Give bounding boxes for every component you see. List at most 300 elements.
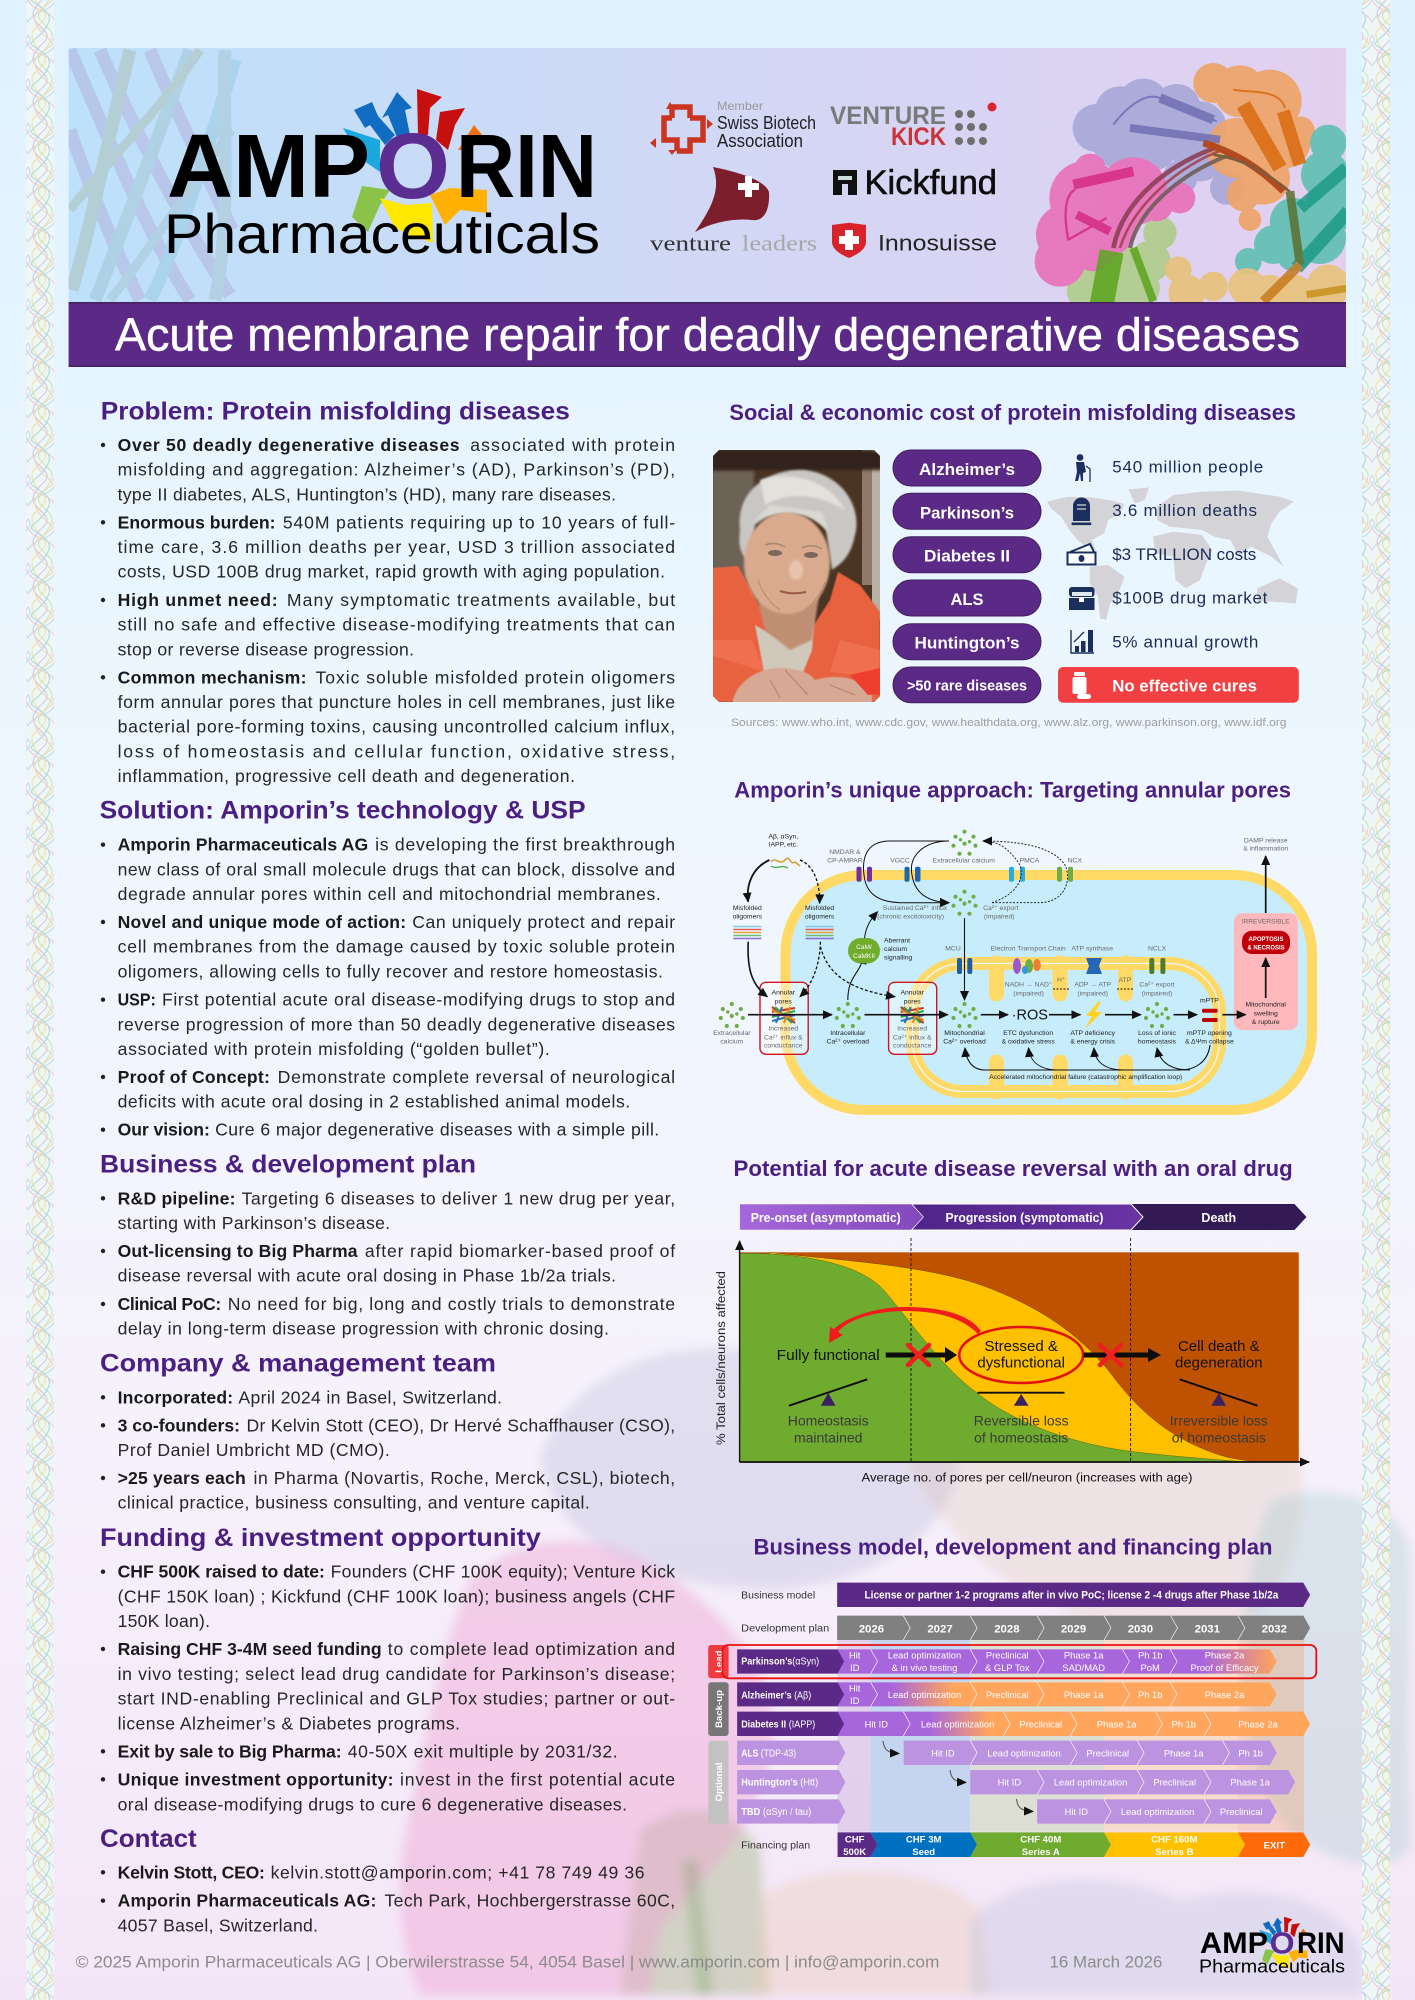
programme stages: Parkinson's: Lead optimization: [888, 1649, 961, 1660]
programme stages: Diabetes II: Lead optimization: [921, 1718, 994, 1729]
axis label: y: % Total cells/neurons affected: [714, 1271, 728, 1445]
side tags: Back-up: [714, 1690, 725, 1728]
programme stages: Huntington's: Hit ID: [998, 1777, 1021, 1788]
stage chevrons: Pre-onset (asymptomatic): [751, 1211, 901, 1225]
text block: business plan bullets: Targeting 6 diseases to deliver 1 new drug per year,: [242, 1188, 675, 1208]
programme stages: Huntington's: Preclinical: [1153, 1777, 1196, 1788]
programme stages: Parkinson's: Hit: [849, 1649, 861, 1660]
annular pore boxes: conductance: [893, 1043, 932, 1050]
text block: funding bullets: 40-50X exit multiple by 2031/32.: [348, 1741, 618, 1761]
text block: business plan bullets: delay in long-term disease progression with chronic dosing.: [118, 1319, 609, 1339]
diagram labels: Loss of ionic: [1138, 1030, 1176, 1037]
diagram labels: oligomers: [733, 914, 763, 921]
financing rounds: 500K: [843, 1847, 866, 1858]
logo: Amporin Pharmaceuticals: AMP: [167, 117, 370, 217]
diagram labels: (impaired): [1013, 990, 1044, 997]
text block: funding bullets: Founders (CHF 100K equity); Venture Kick: [331, 1562, 675, 1582]
text block: problem bullets: bacterial pore-forming toxins, causing uncontrolled calcium influx,: [118, 717, 675, 737]
disease row labels: [741, 1657, 819, 1818]
panel: development and financing plan: [708, 1534, 1316, 1858]
programme stages: ALS: [931, 1747, 1263, 1758]
programme stages: Alzheimer's: Phase 1a: [1064, 1689, 1104, 1700]
calcium dot clusters: [719, 830, 1170, 1028]
text block: contact bullets: kelvin.stott@amporin.com; +41 78 749 49 36: [271, 1862, 645, 1882]
condition pills: Diabetes II: [924, 548, 1010, 566]
diagram labels: (impaired): [984, 914, 1014, 921]
programme stages: Parkinson's: & in vivo testing: [892, 1662, 957, 1673]
text block: problem bullets: Toxic soluble misfolded protein oligomers: [316, 667, 675, 687]
disease row labels: Alzheimer’s (Aβ): [741, 1690, 811, 1701]
balance captions: of homeostasis: [1172, 1429, 1266, 1445]
side tags: [708, 1645, 729, 1824]
panel: social and economic cost: [712, 400, 1299, 729]
text block: problem bullets: type II diabetes, ALS, Huntington’s (HD), many rare diseases.: [118, 484, 616, 504]
text block: company bullets: clinical practice, business consulting, and venture capital.: [118, 1493, 590, 1513]
label: cell death: degeneration: [1175, 1355, 1263, 1372]
icon: walking person: [1075, 454, 1090, 482]
text block: solution bullets: cell membranes from the damage caused by toxic soluble protein: [118, 937, 675, 957]
text block: funding bullets: Raising CHF 3-4M seed funding: [118, 1639, 382, 1659]
text block: solution bullets: new class of oral small molecule drugs that can block, dissolve and: [118, 859, 675, 879]
footer logo: [1199, 1917, 1345, 1976]
heading: solution: Solution: Amporin’s technology & USP: [100, 796, 586, 824]
text block: problem bullets: 540M patients requiring up to 10 years of full-: [283, 512, 675, 532]
logo: Swiss Biotech Association: [650, 99, 816, 155]
heading: company and team: Company & management team: [100, 1350, 496, 1378]
logo: venture leaders: venture: [650, 231, 731, 256]
label: cell death: Cell death &: [1178, 1338, 1260, 1355]
text block: business plan bullets: R&D pipeline:: [118, 1188, 236, 1208]
lead row outline: [722, 1645, 1316, 1678]
programme stages: Diabetes II: Preclinical: [1019, 1718, 1062, 1729]
area chart: [740, 1252, 1299, 1462]
text block: funding bullets: Exit by sale to Big Pharma:: [118, 1741, 342, 1761]
logo: Venture Kick: KICK: [891, 123, 946, 151]
programme stages: TBD: Lead optimization: [1121, 1806, 1194, 1817]
text block: business plan bullets: [101, 1188, 675, 1339]
logo: Amporin Pharmaceuticals: O: [376, 114, 450, 218]
programme stages: Alzheimer's: Phase 2a: [1205, 1689, 1245, 1700]
calmodulin node: CaMKII: [853, 953, 875, 960]
calmodulin node: CaM/: [856, 944, 872, 951]
membrane channels: [856, 867, 1218, 1022]
balance captions: Reversible loss: [974, 1413, 1069, 1429]
diagram labels: swelling: [1254, 1010, 1278, 1017]
logo: Amporin Pharmaceuticals: RIN: [456, 117, 597, 217]
annular pore boxes: Annular: [900, 990, 925, 997]
logo: Venture Kick: [830, 102, 996, 151]
text block: problem bullets: associated with protein: [470, 435, 675, 455]
diagram labels: Ca²⁺ overload: [943, 1038, 986, 1045]
text block: contact bullets: Tech Park, Hochbergerstrasse 60C,: [384, 1891, 675, 1911]
stat: annual growth: 5% annual growth: [1112, 632, 1258, 651]
text block: business plan bullets: disease reversal with acute oral dosing in Phase 1b/2a trials.: [118, 1266, 616, 1286]
stat: 3 trillion costs: $3 TRILLION costs: [1112, 545, 1256, 564]
footer text: © 2025 Amporin Pharmaceuticals AG | Oberwilerstrasse 54, 4054 Basel | www.amporin.com | info@amporin.com: [76, 1953, 939, 1971]
financing rounds: [843, 1834, 1285, 1858]
irreversible outcome box: IRREVERSIBLE: [1242, 918, 1290, 926]
text block: solution bullets: associated with protein misfolding (“golden bullet”).: [118, 1039, 550, 1059]
heading: contact: Contact: [100, 1825, 197, 1853]
text block: contact bullets: 4057 Basel, Switzerland.: [118, 1916, 318, 1936]
text block: contact bullets: Kelvin Stott, CEO:: [118, 1862, 265, 1882]
text block: solution bullets: [101, 835, 675, 1140]
programme stages: Huntington's: Lead optimization: [1054, 1777, 1127, 1788]
footer logo: AMP: [1200, 1927, 1268, 1960]
annular pore boxes: Increased: [768, 1026, 798, 1033]
diagram labels: & energy crisis: [1070, 1038, 1116, 1045]
financing rounds: Seed: [912, 1847, 935, 1858]
condition pills: Alzheimer’s: [919, 461, 1015, 479]
disease row labels: Diabetes II (IAPP): [741, 1719, 815, 1730]
diagram labels: & ΔΨm collapse: [1185, 1038, 1234, 1045]
diagram labels: & oxidative stress: [1002, 1038, 1055, 1045]
diagram labels: MCU: [945, 945, 961, 952]
heading: business model: Business model, development and financing plan: [754, 1534, 1272, 1559]
balance captions: Homeostasis: [788, 1413, 869, 1429]
diagram labels: VGCC: [890, 857, 910, 864]
text block: funding bullets: start IND-enabling Preclinical and GLP Tox studies; partner or out-: [118, 1689, 675, 1709]
text block: solution bullets: Can uniquely protect and repair: [412, 912, 675, 932]
diagram labels: IAPP, etc.: [769, 842, 798, 849]
icon: treasure chest: [1069, 587, 1094, 610]
diagram labels: Extracellular calcium: [933, 857, 995, 864]
text block: solution bullets: oligomers, allowing cells to fully recover and restore homeostasis.: [118, 961, 663, 981]
diagram labels: NCX: [1068, 857, 1082, 864]
financing rounds: CHF 3M: [906, 1834, 942, 1845]
diagram labels: Aberrant: [884, 937, 910, 944]
heading: annular pores: Amporin’s unique approach: Targeting annular pores: [734, 777, 1291, 802]
development plan years: 2031: [1195, 1623, 1221, 1635]
programme stages: Parkinson's: ID: [850, 1662, 860, 1673]
irreversible outcome box: & NECROSIS: [1247, 946, 1285, 952]
condition pills: Huntington’s: [914, 634, 1020, 652]
logo: Swiss Biotech Association: Association: [717, 130, 803, 151]
programme stages: Parkinson's: Phase 1a: [1064, 1649, 1104, 1660]
logo: Kickfund: Kickfund: [864, 164, 997, 202]
diagram labels: homeostasis: [1138, 1038, 1177, 1045]
text block: problem bullets: [101, 435, 675, 786]
mitochondrion: [912, 963, 1220, 1092]
stat: 540 million people: 540 million people: [1112, 458, 1263, 477]
axis label: x: Average no. of pores per cell/neuron (increases with age): [862, 1471, 1192, 1485]
programme stages: Parkinson's: Preclinical: [986, 1649, 1029, 1660]
diagram labels: NCLX: [1148, 945, 1167, 952]
text block: solution bullets: Amporin Pharmaceuticals AG: [118, 835, 368, 855]
diagram labels: Mitochondrial: [1245, 1002, 1286, 1009]
condition pills: Parkinson’s: [920, 504, 1014, 522]
financing rounds: EXIT: [1264, 1840, 1285, 1851]
text block: solution bullets: Demonstrate complete reversal of neurological: [278, 1067, 675, 1087]
text block: solution bullets: is developing the first breakthrough: [375, 835, 675, 855]
programme stages: Diabetes II: Hit ID: [865, 1718, 888, 1729]
text block: problem bullets: inflammation, progressive cell death and degeneration.: [118, 766, 575, 786]
text block: problem bullets: Enormous burden:: [118, 512, 275, 532]
icon: banknotes: [1068, 544, 1096, 564]
row labels: Business model: [741, 1590, 815, 1601]
stage chevrons: [740, 1204, 1306, 1230]
logo: Amporin Pharmaceuticals: Pharmaceuticals: [164, 202, 600, 265]
text block: problem bullets: Common mechanism:: [118, 667, 306, 687]
disease row labels: TBD (αSyn / tau): [741, 1807, 811, 1818]
stage chevrons: Death: [1201, 1211, 1236, 1225]
diagram labels: NMDAR &: [829, 849, 861, 856]
condition pills: >50 rare diseases: [907, 678, 1027, 694]
text block: funding bullets: [101, 1562, 675, 1814]
diagram labels: CP-AMPAR: [827, 858, 863, 865]
programme stages: ALS: Lead optimization: [987, 1747, 1061, 1758]
text block: solution bullets: USP:: [118, 990, 156, 1010]
balance captions: [788, 1413, 1268, 1445]
diagram labels: signalling: [884, 955, 913, 962]
gantt shapes: [737, 1583, 1310, 1857]
diagram labels: (impaired): [1077, 990, 1108, 997]
development plan years: 2032: [1262, 1623, 1287, 1635]
diagram labels: mPTP: [1200, 997, 1219, 1004]
banner: protein ring illustration: [1034, 63, 1346, 302]
diagram labels: ADP → ATP: [1074, 982, 1112, 989]
programme stages: Alzheimer's: ID: [850, 1695, 860, 1706]
annular pore boxes: Ca²⁺ influx &: [893, 1034, 932, 1041]
programme stages: ALS: Hit ID: [931, 1747, 955, 1758]
diagram labels: ETC dysfunction: [1003, 1030, 1053, 1037]
disease row labels: Huntington’s (Htt): [741, 1778, 818, 1789]
world map background: [1047, 487, 1298, 620]
heading: business plan: Business & development plan: [100, 1150, 476, 1178]
diagram labels: Extracellular: [713, 1030, 751, 1037]
programme stages: ALS: Phase 1a: [1164, 1747, 1204, 1758]
header banner: [69, 48, 1361, 321]
callout: no effective cures: No effective cures: [1112, 677, 1257, 696]
balance captions: of homeostasis: [974, 1429, 1068, 1445]
panel: disease reversal chart: [714, 1156, 1309, 1485]
development plan years: 2026: [859, 1623, 884, 1635]
sources note: Sources: www.who.int, www.cdc.gov, www.healthdata.org, www.alz.org, www.parkinson.org, www.idf.org: [731, 717, 1287, 729]
programme stages: Diabetes II: Ph 1b: [1171, 1718, 1196, 1729]
text block: solution bullets: Our vision:: [118, 1120, 210, 1140]
heading: social and economic cost: Social & economic cost of protein misfolding diseases: [729, 400, 1296, 425]
diagram labels: Sustained Ca²⁺ influx: [883, 905, 948, 912]
seesaw balances: [789, 1379, 1258, 1406]
development plan years: 2030: [1128, 1623, 1153, 1635]
footer logo: RIN: [1297, 1927, 1345, 1960]
development plan years: 2027: [927, 1623, 953, 1635]
reversal arrow: [829, 1307, 981, 1343]
text block: business plan bullets: Clinical PoC:: [118, 1294, 221, 1314]
diagram labels: H⁺: [1057, 977, 1066, 984]
diagram labels: Mitochondrial: [944, 1030, 985, 1037]
programme stages: Alzheimer's: Lead optimization: [888, 1689, 961, 1700]
programme stages: Parkinson's: [849, 1649, 1259, 1673]
text block: solution bullets: First potential acute oral disease-modifying drugs to stop and: [162, 990, 675, 1010]
text block: problem bullets: loss of homeostasis and cellular function, oxidative stress,: [118, 741, 675, 761]
text block: business plan bullets: after rapid biomarker-based proof of: [365, 1241, 675, 1261]
footer logo: Pharmaceuticals: [1199, 1956, 1345, 1976]
row labels: Development plan: [741, 1624, 829, 1635]
diagram labels: Aβ, αSyn,: [768, 833, 798, 840]
programme stages: Alzheimer's: Preclinical: [986, 1689, 1029, 1700]
text block: company bullets: 3 co-founders:: [118, 1415, 240, 1435]
logo: Innosuisse: [832, 223, 997, 258]
annular pore boxes: [760, 982, 937, 1054]
heading: funding: Funding & investment opportunity: [100, 1524, 541, 1552]
diagram labels: Electron Transport Chain: [991, 945, 1066, 952]
logo: venture leaders: [650, 167, 817, 256]
diagram labels: ·ROS: [1012, 1007, 1048, 1023]
text block: problem bullets: misfolding and aggregation: Alzheimer’s (AD), Parkinson’s (PD),: [118, 460, 675, 480]
development plan years: 2029: [1061, 1623, 1086, 1635]
calmodulin node: [848, 938, 880, 963]
programme stages: Parkinson's: Phase 2a: [1205, 1649, 1245, 1660]
disease row labels: Parkinson’s(αSyn): [741, 1657, 819, 1668]
programme stages: Parkinson's: PoM: [1141, 1662, 1160, 1673]
financing rounds: Series A: [1022, 1847, 1060, 1858]
business model bar label: License or partner 1-2 programs after in vivo PoC; license 2 -4 drugs after Phase 1b/2a: [864, 1590, 1278, 1602]
text block: funding bullets: in vivo testing; select lead drug candidate for Parkinson’s disease;: [118, 1664, 675, 1684]
logo: Swiss Biotech Association: Member: [717, 99, 763, 113]
diagram labels: ATP: [1119, 977, 1132, 984]
label: cell death: [1175, 1338, 1263, 1372]
diagram labels: PMCA: [1020, 857, 1040, 864]
diagram labels: Ca²⁺ export: [983, 905, 1019, 912]
financing rounds: Series B: [1155, 1847, 1194, 1858]
programme stages: Huntington's: Phase 1a: [1230, 1777, 1271, 1788]
diagram labels: DAMP release: [1244, 837, 1288, 844]
text block: solution bullets: deficits with acute oral dosing in 2 established animal models.: [118, 1092, 630, 1112]
text block: company bullets: Prof Daniel Umbricht MD (CMO).: [118, 1440, 390, 1460]
text block: company bullets: April 2024 in Basel, Switzerland.: [238, 1387, 502, 1407]
programme stages: Diabetes II: Phase 2a: [1238, 1718, 1279, 1729]
text block: company bullets: [101, 1387, 675, 1513]
pathway arrows: [748, 841, 1266, 1070]
text block: funding bullets: Unique investment opportunity:: [118, 1769, 393, 1789]
diagram labels: & inflammation: [1243, 846, 1288, 853]
diagram labels: ATP synthase: [1071, 945, 1113, 952]
staggered start arrows: [883, 1741, 1033, 1812]
stage: stressed and dysfunctional: dysfunctional: [977, 1355, 1065, 1372]
annular pore boxes: conductance: [764, 1043, 803, 1050]
programme stages: Alzheimer's: Hit: [849, 1682, 861, 1693]
annular pore boxes: Annular: [772, 990, 796, 997]
text block: business plan bullets: starting with Parkinson’s disease.: [118, 1213, 390, 1233]
irreversible outcome box: [1234, 913, 1298, 1030]
text block: solution bullets: Novel and unique mode of action:: [118, 912, 406, 932]
text block: problem bullets: still no safe and effective disease-modifying treatments that can: [118, 615, 675, 635]
footer logo: O: [1270, 1925, 1295, 1960]
diagram labels: [713, 833, 1288, 1081]
text block: problem bullets: form annular pores that puncture holes in cell membranes, just like: [118, 692, 675, 712]
chart axes: [740, 1238, 1309, 1462]
icon: gravestone: [1072, 498, 1091, 525]
text block: funding bullets: 150K loan).: [118, 1611, 210, 1631]
programme stages: Alzheimer's: [849, 1682, 1245, 1706]
stat: 3.6 million deaths: 3.6 million deaths: [1112, 501, 1257, 520]
diagram labels: ATP deficiency: [1070, 1030, 1116, 1037]
programme stages: ALS: Ph 1b: [1238, 1747, 1263, 1758]
text block: problem bullets: Many symptomatic treatments available, but: [287, 590, 675, 610]
development plan years: [859, 1623, 1287, 1635]
programme stages: ALS: Preclinical: [1086, 1747, 1129, 1758]
text block: company bullets: Incorporated:: [118, 1387, 233, 1407]
text block: solution bullets: Proof of Concept:: [118, 1067, 270, 1087]
text block: funding bullets: license Alzheimer’s & Diabetes programs.: [118, 1713, 460, 1733]
text block: problem bullets: High unmet need:: [118, 590, 278, 610]
balance captions: maintained: [794, 1429, 862, 1445]
icon: growth chart: [1071, 630, 1094, 653]
text block: company bullets: Dr Kelvin Stott (CEO), Dr Hervé Schaffhauser (CSO),: [246, 1415, 675, 1435]
label: fully functional: Fully functional: [777, 1347, 880, 1364]
stage chevrons: Progression (symptomatic): [946, 1211, 1104, 1225]
row labels: Financing plan: [741, 1841, 810, 1852]
diagram labels: Accelerated mitochondrial failure (catastrophic amplification loop): [989, 1074, 1182, 1081]
heading: problem: Problem: Protein misfolding diseases: [101, 397, 570, 425]
text block: funding bullets: CHF 500K raised to date:: [118, 1562, 325, 1582]
diagram labels: (chronic excitotoxicity): [877, 914, 944, 921]
programme stages: Alzheimer's: Ph 1b: [1138, 1689, 1162, 1700]
financing rounds: CHF 160M: [1151, 1834, 1197, 1845]
programme stages: Diabetes II: [865, 1718, 1279, 1729]
stat: 100B drug market: $100B drug market: [1112, 588, 1268, 607]
condition pills: [893, 450, 1041, 703]
banner: woven ribbon decoration: [70, 50, 235, 300]
text block: solution bullets: reverse progression of more than 50 deadly degenerative diseases: [118, 1014, 675, 1034]
progression arrows: [886, 1347, 1161, 1363]
diagram labels: Intracellular: [830, 1030, 866, 1037]
text block: funding bullets: (CHF 150K loan) ; Kickfund (CHF 100K loan); business angels (CHF: [118, 1586, 675, 1606]
portrait photo: [712, 450, 882, 704]
diagram labels: Misfolded: [733, 905, 762, 912]
financing rounds: CHF 40M: [1020, 1834, 1061, 1845]
diagram labels: & rupture: [1252, 1019, 1280, 1026]
annular pore boxes: Increased: [897, 1026, 927, 1033]
logo: Venture Kick: VENTURE: [830, 102, 946, 130]
programme stages: Parkinson's: & GLP Tox: [985, 1662, 1030, 1673]
text block: solution bullets: degrade annular pores within cell and mitochondrial membranes.: [118, 884, 661, 904]
diagram labels: NADH → NAD⁺: [1005, 982, 1053, 989]
programme stages: Parkinson's: SAD/MAD: [1062, 1662, 1105, 1673]
disease row labels: ALS (TDP-43): [741, 1748, 796, 1759]
logo: Swiss Biotech Association: Swiss Biotech: [717, 112, 816, 133]
blocking crosses: [908, 1345, 1121, 1365]
text block: company bullets: in Pharma (Novartis, Roche, Merck, CSL), biotech,: [254, 1468, 675, 1488]
text block: business plan bullets: No need for big, long and costly trials to demonstrate: [228, 1294, 675, 1314]
programme stages: Huntington's: [998, 1777, 1271, 1788]
text block: contact bullets: [101, 1862, 675, 1936]
text block: solution bullets: Cure 6 major degenerative diseases with a simple pill.: [215, 1120, 659, 1140]
cell body: [786, 875, 1312, 1110]
condition pills: ALS: [950, 591, 984, 609]
annular pore boxes: pores: [904, 998, 921, 1005]
footer text: 16 March 2026: [1050, 1953, 1162, 1971]
panel: annular pores mechanism diagram: [713, 777, 1312, 1110]
diagram labels: (impaired): [1142, 990, 1172, 997]
programme stages: Parkinson's: Proof of Efficacy: [1190, 1662, 1259, 1673]
title band: Acute membrane repair for deadly degenerative diseases: [115, 308, 1300, 360]
logo: venture leaders: leaders: [742, 231, 817, 256]
irreversible outcome box: APOPTOSIS: [1249, 937, 1283, 943]
financing rounds: CHF: [845, 1834, 865, 1845]
text block: problem bullets: stop or reverse disease progression.: [118, 639, 414, 659]
diagram labels: oligomers: [805, 914, 835, 921]
programme stages: TBD: [1065, 1806, 1263, 1817]
stage: stressed and dysfunctional: Stressed &: [985, 1338, 1058, 1355]
balance captions: Irreversible loss: [1170, 1413, 1268, 1429]
side tags: Lead: [714, 1650, 725, 1673]
diagram labels: mPTP opening: [1187, 1030, 1232, 1037]
logo: Amporin Pharmaceuticals: [164, 89, 600, 265]
text block: funding bullets: to complete lead optimization and: [388, 1639, 675, 1659]
icon: lightning bolt: [1085, 1002, 1102, 1029]
